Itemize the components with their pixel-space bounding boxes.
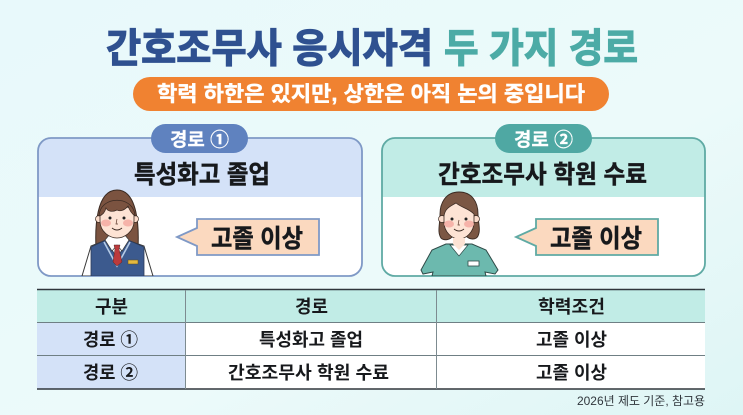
callout: route 2 requirement: 고졸 이상	[550, 225, 642, 253]
table header: 학력조건	[538, 297, 605, 317]
callout: route 1 requirement	[177, 219, 319, 255]
table header: 구분	[95, 297, 128, 317]
footnote: 2026년 제도 기준, 참고용	[577, 394, 705, 408]
badge: route 1: 경로 ①	[170, 129, 229, 151]
table row: route 2: 고졸 이상	[536, 363, 607, 383]
badge: route 2: 경로 ②	[514, 129, 573, 151]
table row: route 2: 경로 ②	[83, 363, 138, 383]
callout: route 2 requirement	[516, 219, 658, 255]
comparison table	[37, 290, 705, 389]
panel: route 2	[382, 124, 705, 276]
badge: route 2	[495, 124, 592, 153]
icon: nurse character	[421, 192, 498, 276]
badge: route 1	[151, 124, 248, 153]
table row: route 1: 경로 ①	[83, 330, 138, 350]
icon: student character	[82, 190, 153, 276]
table row: route 2: 간호조무사 학원 수료	[228, 363, 389, 383]
table header: 경로	[295, 297, 328, 317]
heading: route 1: 특성화고 졸업	[134, 161, 270, 189]
subtitle pill	[133, 77, 609, 111]
table row: route 2	[83, 363, 607, 383]
table row: route 1: 고졸 이상	[536, 330, 607, 350]
table header	[95, 297, 605, 317]
table row: route 1: 특성화고 졸업	[259, 330, 363, 350]
heading: route 2: 간호조무사 학원 수료	[438, 161, 647, 189]
title	[106, 27, 638, 71]
panel: route 1	[38, 124, 362, 276]
subtitle pill: 학력 하한은 있지만, 상한은 아직 논의 중입니다	[157, 83, 585, 106]
title: 두 가지 경로	[444, 27, 638, 71]
callout: route 1 requirement: 고졸 이상	[211, 225, 303, 253]
table row: route 1	[83, 330, 607, 350]
title: 간호조무사 응시자격	[106, 27, 433, 71]
